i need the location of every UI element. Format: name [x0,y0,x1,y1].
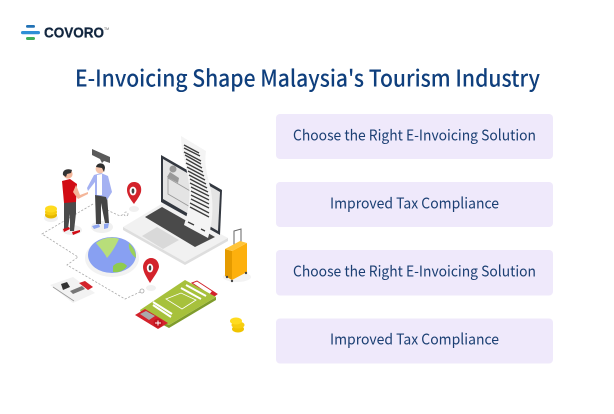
icon: stack of coins left [44,206,58,222]
icon: globe [85,237,139,277]
icon: stack of coins right [230,318,244,332]
card: Choose the Right E-Invoicing Solution: Choose the Right E-Invoicing Solution [293,124,536,146]
laptop with invoice [123,136,228,265]
laptop base [123,203,228,262]
dashed route lines [42,204,144,299]
laptop screen [161,155,222,235]
card: Choose the Right E-Invoicing Solution (repeat) [276,250,553,296]
icon: map pin lower [143,258,159,291]
illustration: tourism and e-invoicing [42,136,251,332]
logo: Covoro: COVORO [44,24,104,42]
card: Choose the Right E-Invoicing Solution (repeat): Choose the Right E-Invoicing Solution [293,260,536,282]
card: Improved Tax Compliance (repeat) [276,318,553,364]
keyboard [145,207,215,247]
id card [50,277,95,303]
title: E-Invoicing Shape Malaysia's Tourism Industry [75,60,540,94]
card: Improved Tax Compliance (repeat): Improved Tax Compliance [330,328,499,350]
passport and tickets [135,280,217,329]
person: man in red shirt [62,169,88,235]
icon: map pin upper [127,182,141,212]
person: man in blue jacket [87,149,113,233]
logo: Covoro: TM [104,27,109,31]
card: Improved Tax Compliance [276,182,553,227]
invoice paper [181,136,212,238]
trackpad [142,227,179,249]
icon: yellow suitcase [223,229,251,282]
card: Choose the Right E-Invoicing Solution [276,114,553,159]
card: Improved Tax Compliance: Improved Tax Compliance [330,192,499,214]
